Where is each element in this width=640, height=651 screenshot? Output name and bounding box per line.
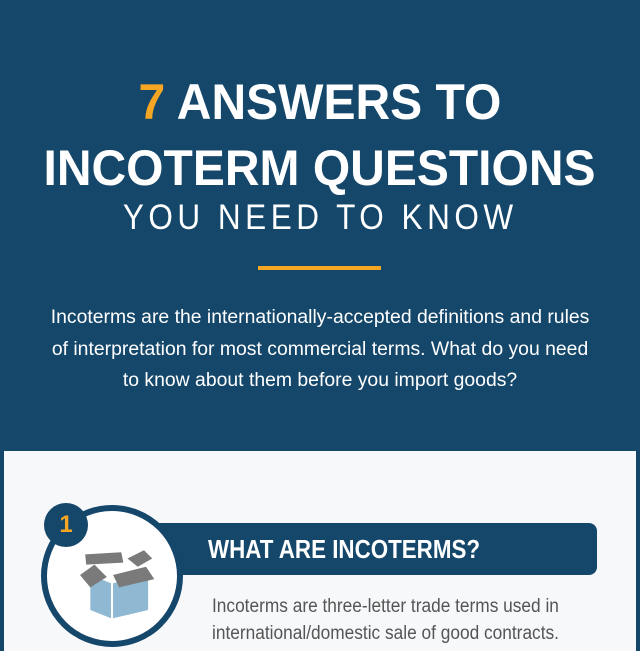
accent line [258, 266, 381, 270]
intro paragraph [51, 307, 589, 391]
icon circle [41, 505, 183, 647]
banner: heading [150, 523, 597, 575]
intro paragraph: to know about them before you import goods? [123, 370, 517, 391]
icon: box [80, 550, 154, 618]
body text: Incoterms are three-letter trade terms used in [212, 596, 559, 617]
intro paragraph: Incoterms are the internationally-accepted definitions and rules [51, 307, 589, 328]
number badge: 1 [59, 511, 73, 538]
title [44, 74, 596, 196]
title: 7 ANSWERS TO [139, 74, 501, 130]
body text [212, 596, 559, 644]
body text: international/domestic sale of good contracts. [212, 623, 559, 644]
panel: question 1 [4, 451, 636, 651]
intro paragraph: of interpretation for most commercial terms. What do you need [52, 338, 588, 360]
title: INCOTERM QUESTIONS [44, 140, 596, 196]
subtitle: YOU NEED TO KNOW [123, 198, 517, 237]
heading text: WHAT ARE INCOTERMS? [208, 534, 480, 564]
number badge [44, 503, 88, 547]
